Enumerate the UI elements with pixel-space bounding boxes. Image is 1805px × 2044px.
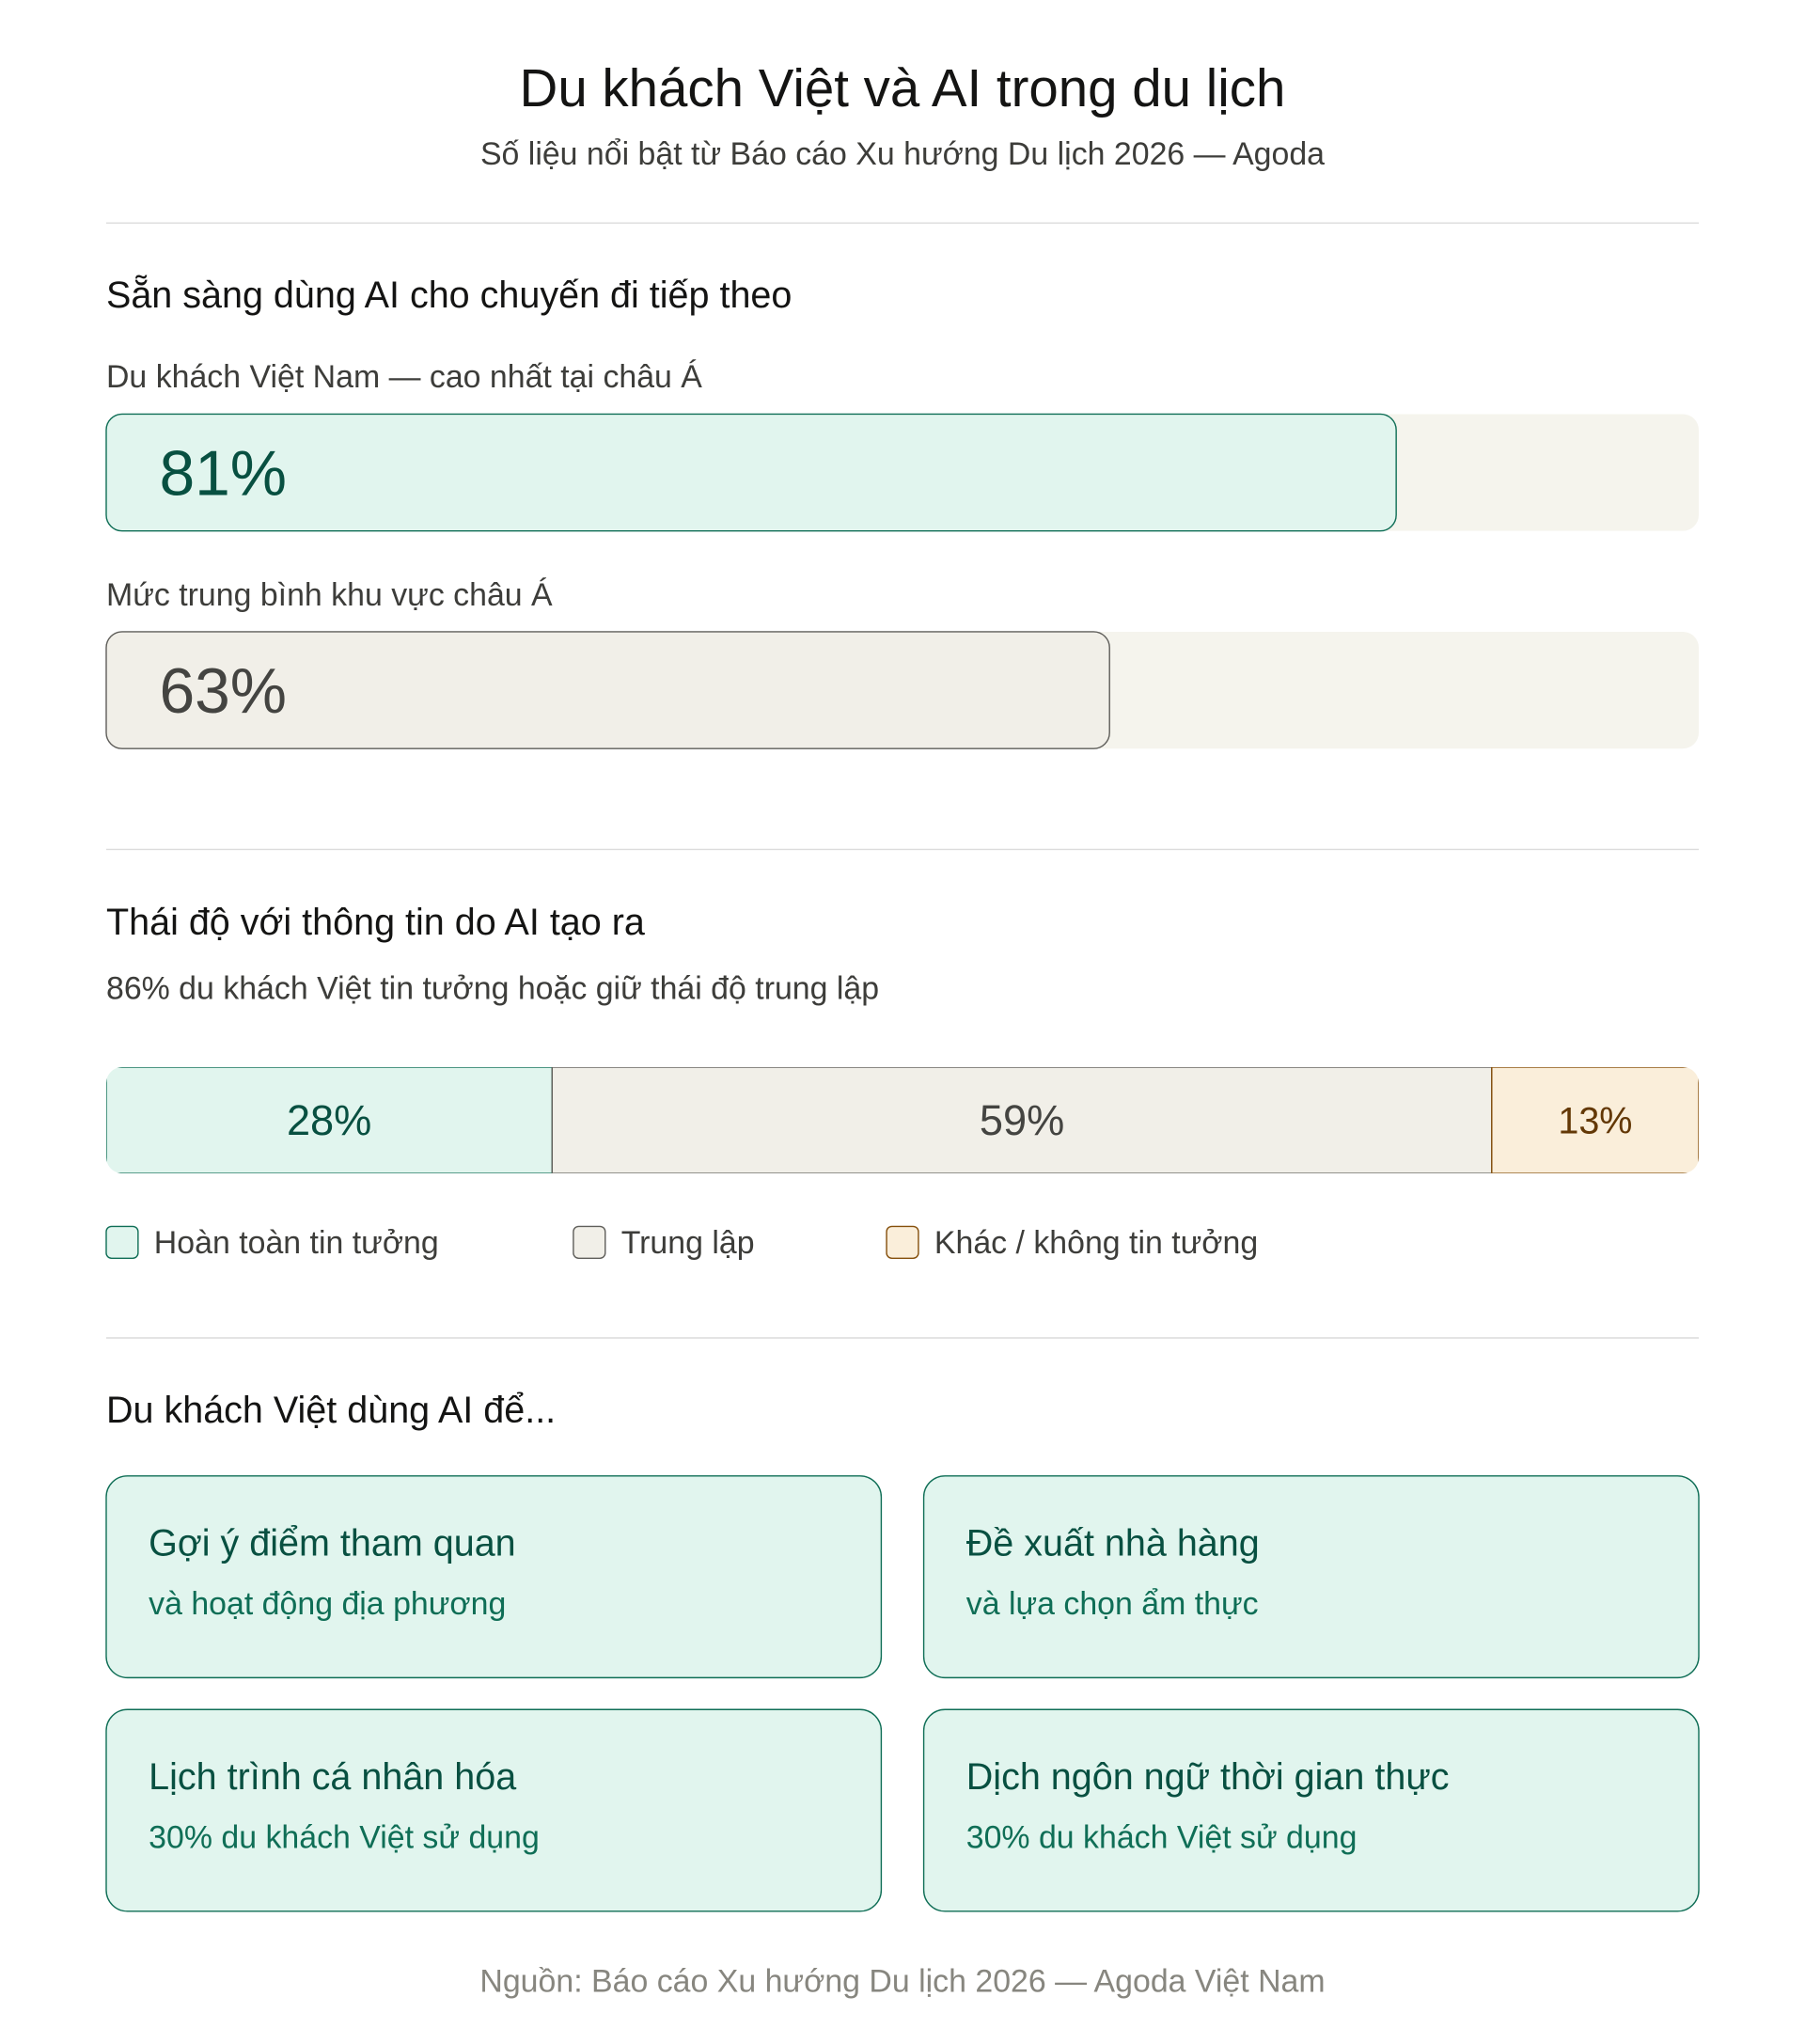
- stacked bar chart: 59%: [980, 1096, 1064, 1144]
- card: translation: 30% du khách Việt sử dụng: [966, 1820, 1357, 1856]
- panel: attitude to AI information: [106, 902, 1699, 1261]
- bar chart: Vietnam 81%: 81%: [159, 438, 287, 509]
- card: translation: Dịch ngôn ngữ thời gian thực: [966, 1756, 1450, 1798]
- card: attractions: [106, 1476, 881, 1677]
- stacked bar chart: 28%: [287, 1096, 371, 1144]
- legend: [106, 1225, 1258, 1261]
- card: attractions: và hoạt động địa phương: [149, 1586, 506, 1622]
- card: restaurants: [924, 1476, 1699, 1677]
- stacked bar chart: 13%: [1558, 1101, 1632, 1142]
- subtitle: Số liệu nổi bật từ Báo cáo Xu hướng Du lịch 2026 — Agoda: [480, 136, 1325, 172]
- card: itinerary: [106, 1709, 881, 1911]
- card: itinerary: 30% du khách Việt sử dụng: [149, 1820, 540, 1856]
- heading: attitude: Thái độ với thông tin do AI tạo ra: [106, 902, 645, 943]
- label: Vietnamese travellers: Du khách Việt Nam — cao nhất tại châu Á: [106, 359, 702, 395]
- card: itinerary: Lịch trình cá nhân hóa: [149, 1756, 516, 1798]
- bar chart: Vietnam 81%: [106, 414, 1699, 531]
- legend: Khác / không tin tưởng: [934, 1225, 1258, 1261]
- label: Asia average: Mức trung bình khu vực châu Á: [106, 577, 553, 613]
- legend: Hoàn toàn tin tưởng: [154, 1225, 439, 1261]
- panel: uses of AI: [106, 1390, 1699, 1911]
- stacked bar chart: [106, 1067, 1699, 1173]
- bar chart: Asia 63%: [106, 632, 1699, 748]
- legend: Trung lập: [621, 1225, 755, 1261]
- card: attractions: Gợi ý điểm tham quan: [149, 1522, 516, 1564]
- card: restaurants: Đề xuất nhà hàng: [966, 1522, 1260, 1564]
- heading: readiness: Sẵn sàng dùng AI cho chuyến đi tiếp theo: [106, 275, 792, 316]
- description: attitude: 86% du khách Việt tin tưởng hoặc giữ thái độ trung lập: [106, 970, 879, 1006]
- title: Du khách Việt và AI trong du lịch: [520, 58, 1285, 118]
- panel: readiness to use AI: [106, 275, 1699, 748]
- heading: uses: Du khách Việt dùng AI để...: [106, 1390, 556, 1431]
- bar chart: Asia 63%: 63%: [159, 656, 287, 727]
- card: translation: [924, 1709, 1699, 1911]
- card: restaurants: và lựa chọn ẩm thực: [966, 1586, 1259, 1622]
- footer source: Nguồn: Báo cáo Xu hướng Du lịch 2026 — Agoda Việt Nam: [479, 1963, 1326, 1999]
